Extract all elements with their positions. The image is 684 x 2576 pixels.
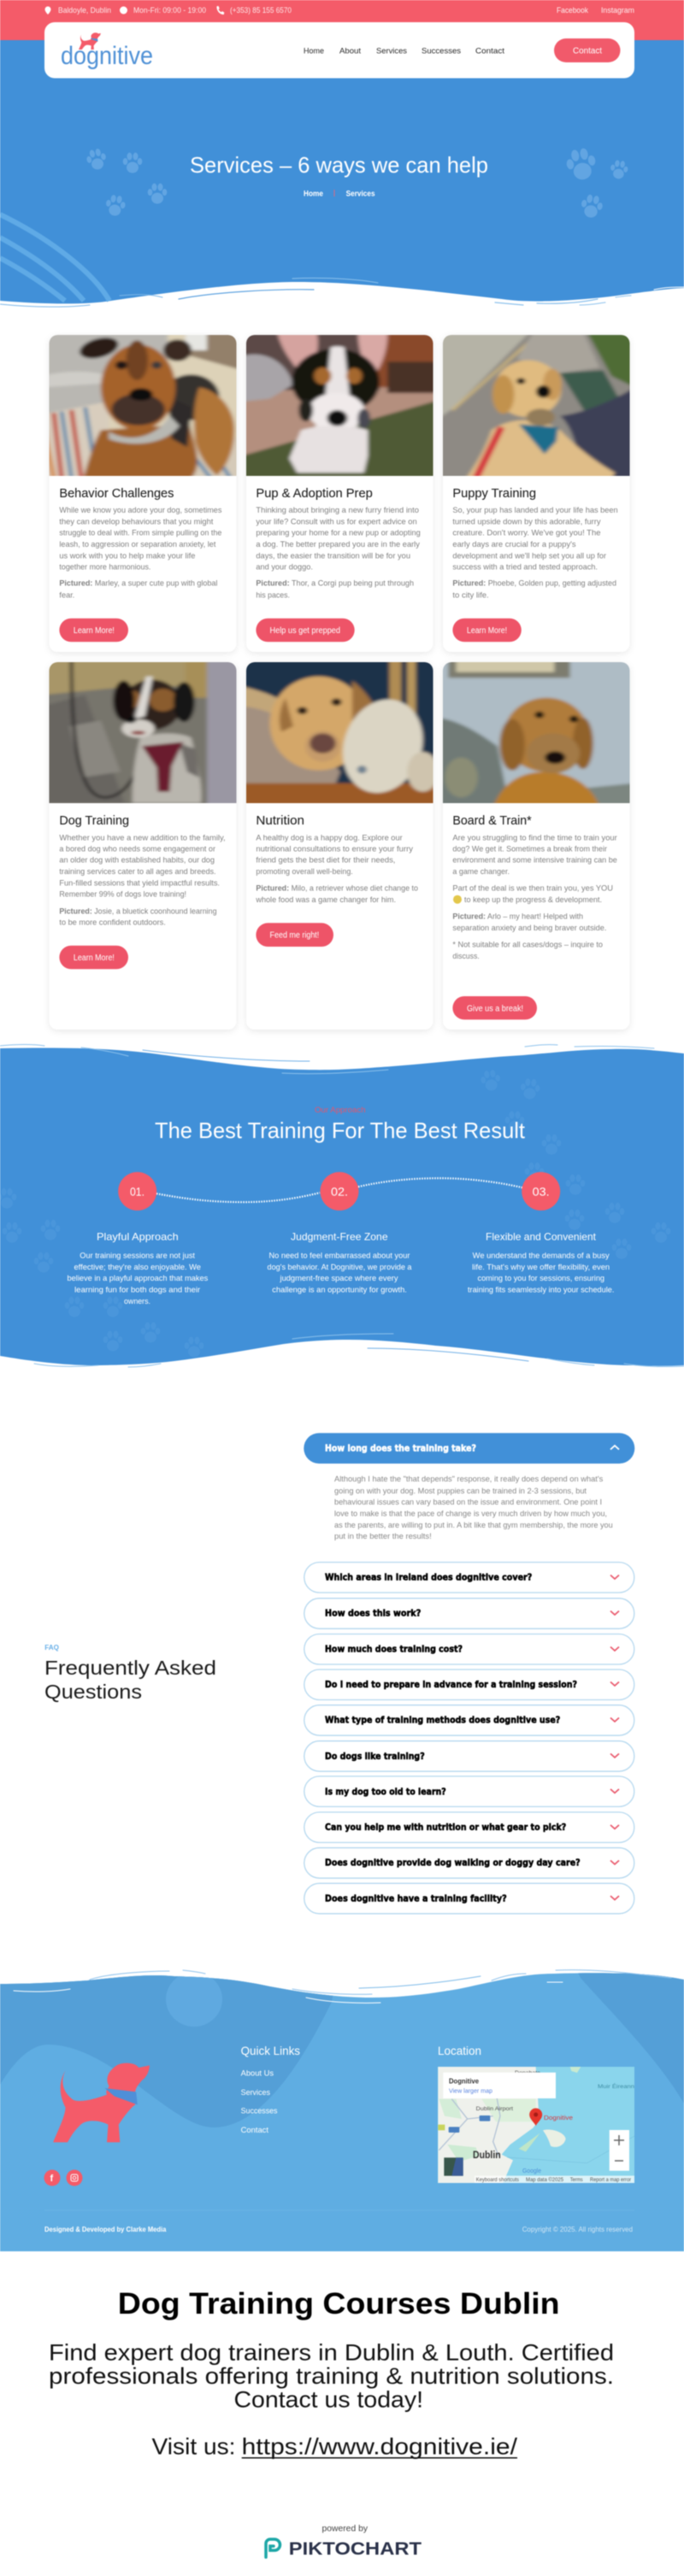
footer panel — [0, 1965, 684, 2251]
card body: turned upside down by this adorable, furry — [452, 517, 601, 525]
card body: whole food was a game changer for him. — [255, 895, 396, 904]
closing paragraph: professionals offering training & nutrition solutions. — [49, 2363, 614, 2389]
top bar — [0, 0, 684, 41]
icon: piktochart logo — [266, 2539, 280, 2557]
map info box: View larger map — [449, 2086, 492, 2095]
card body: dog? We get it. Sometimes a break from their — [452, 844, 607, 853]
map info box — [443, 2073, 556, 2098]
question 10 — [304, 1848, 634, 1878]
card body: Pictured: Arlo – my heart! Helped with — [452, 912, 583, 920]
card body: early days are crucial for a puppy's — [452, 540, 576, 549]
section wave strokes — [0, 1044, 684, 1367]
menu: Contact — [475, 46, 504, 56]
step 3: training fits seamlessly into your schedule. — [468, 1285, 614, 1294]
card body: Part of the deal is we then train you, yes YOU — [452, 884, 613, 893]
phone number: (+353) 85 155 6570 — [230, 6, 292, 15]
step 3: 03. — [533, 1184, 550, 1198]
step 1: believe in a playful approach that makes — [67, 1274, 209, 1282]
step 3 — [468, 1172, 614, 1294]
breadcrumb — [304, 190, 375, 198]
card: Pup & Adoption Prep — [242, 333, 439, 652]
hero arcs — [0, 214, 109, 301]
button — [256, 619, 355, 642]
card body: * Not suitable for all cases/dogs – inquire to — [452, 940, 603, 948]
card body: Fun-filled sessions that yield impactful results. — [59, 878, 220, 887]
open question: How long does the training take? — [325, 1444, 476, 1454]
closing paragraph: Contact us today! — [234, 2387, 423, 2413]
card body: Pictured: Thor, a Corgi pup being put through — [256, 579, 414, 588]
button — [256, 923, 333, 947]
address: Baldoyle, Dublin — [58, 6, 111, 15]
question 9: Can you help me with nutrition or what gear to pick? — [325, 1822, 566, 1833]
card title: Dog Training — [59, 813, 129, 828]
card title: Behavior Challenges — [59, 486, 174, 501]
card: Behavior Challenges — [42, 333, 242, 652]
card body: friend gets the best diet for their needs, — [256, 856, 395, 865]
card body: While we know you adore your dog, sometimes — [59, 506, 222, 514]
card body: separation anxiety and being braver outside. — [452, 924, 606, 932]
opening hours: Mon-Fri: 09:00 - 19:00 — [133, 6, 206, 15]
map attribution: Terms — [570, 2178, 583, 2183]
card body: a game changer. — [452, 867, 510, 876]
card body: and your doggo. — [256, 562, 313, 571]
button: Help us get prepped — [270, 626, 340, 636]
button: Feed me right! — [270, 931, 319, 940]
icon: facebook: f — [50, 2174, 53, 2184]
step 1: effective; they're also enjoyable. We — [74, 1263, 201, 1271]
map attribution: Keyboard shortcuts — [476, 2178, 519, 2183]
map attribution: Report a map error — [590, 2178, 631, 2183]
hero paw prints — [85, 147, 629, 220]
card body: his paces. — [256, 590, 290, 599]
card body: development and we'll help set you all up for — [452, 551, 606, 560]
dotted connector two — [358, 1178, 522, 1188]
quick links — [241, 2044, 300, 2135]
card body: us work with you to help make your life — [59, 551, 195, 560]
map attribution — [475, 2175, 634, 2183]
card body: environment and some intensive training can be — [452, 856, 617, 865]
hero wave strokes — [0, 278, 684, 307]
card body: a bored dog who needs some engagement or — [59, 844, 215, 853]
logo — [61, 32, 153, 70]
question 11: Does dognitive have a training facility? — [325, 1893, 507, 1904]
step 2: No need to feel embarrassed about your — [268, 1251, 410, 1259]
question 2 — [304, 1562, 634, 1593]
step 3: Flexible and Convenient — [486, 1230, 597, 1242]
quick links: Successes — [241, 2107, 278, 2115]
button: Learn More! — [467, 626, 507, 636]
map marker — [529, 2109, 573, 2126]
eyebrow: Our Approach — [315, 1106, 366, 1114]
map: Dublin — [473, 2151, 501, 2161]
card body: to be more confident outdoors. — [59, 918, 166, 926]
FAQ label: FAQ — [44, 1644, 59, 1652]
icon: facebook — [44, 2170, 60, 2186]
step 2: 02. — [331, 1184, 348, 1198]
panel: approach — [0, 1044, 684, 1367]
card body — [59, 506, 222, 599]
location heading: Location — [438, 2044, 481, 2057]
card body: to city life. — [452, 590, 489, 599]
menu: Services — [376, 46, 407, 56]
answer: going on with your dog. Most puppies can be trained in 2-3 sessions, but — [334, 1487, 587, 1495]
question 10: Does dognitive provide dog walking or doggy day care? — [325, 1858, 581, 1869]
quick links: Services — [241, 2088, 270, 2098]
hero title: Services – 6 ways we can help — [190, 152, 488, 178]
FAQ heading: Frequently Asked — [44, 1657, 216, 1679]
map: Google — [522, 2168, 541, 2174]
photo: Phoebe — [439, 333, 634, 478]
card body — [452, 833, 617, 960]
facebook link: Facebook — [557, 6, 588, 15]
button — [452, 996, 537, 1019]
card body: Pictured: Marley, a super cute pup with global — [59, 579, 217, 588]
question 6: What type of training methods does dognitive use? — [325, 1716, 560, 1726]
card body: creature. Don't worry. We've got you! The — [452, 529, 600, 537]
footer wave strokes — [14, 1970, 671, 2003]
question 7: Do dogs like training? — [325, 1752, 425, 1762]
question 7 — [304, 1741, 634, 1771]
card title: Puppy Training — [452, 486, 536, 501]
card body: Pictured: Phoebe, Golden pup, getting adjusted — [452, 579, 616, 588]
dotted connector one — [156, 1193, 320, 1202]
card: Board & Train — [439, 658, 634, 1030]
step 2: Judgment-Free Zone — [291, 1230, 388, 1242]
visit link: https://www.dognitive.ie/ — [242, 2434, 518, 2460]
card body: a dog. The better prepared you are in the early — [256, 540, 420, 549]
navigation card — [44, 22, 634, 79]
card body: promoting overall well-being. — [256, 867, 353, 876]
icon: footer dog — [53, 2063, 150, 2142]
card body: your life? Consult with us for expert advice on — [256, 517, 417, 525]
question 3 — [304, 1599, 634, 1628]
card body — [59, 833, 226, 926]
photo: Thor — [242, 333, 439, 478]
question 5 — [304, 1669, 634, 1700]
card title: Board & Train* — [452, 813, 532, 828]
card body: nutritional consultations to ensure your furry — [256, 844, 413, 853]
icon: logo dog — [79, 32, 101, 50]
piktochart badge: powered by — [321, 2524, 368, 2534]
step 2: judgment-free space where every — [279, 1274, 398, 1282]
card body — [452, 506, 618, 599]
closing block — [49, 2287, 614, 2460]
card body: Pictured: Milo, a retriever whose diet change to — [256, 884, 418, 893]
step 3: We understand the demands of a busy — [473, 1251, 610, 1259]
map marker: Dognitive — [544, 2114, 573, 2121]
breadcrumb: Home — [304, 190, 323, 198]
card body: days, the easier the transition will be for you — [256, 551, 410, 560]
step 1: Our training sessions are not just — [80, 1251, 195, 1259]
question 8: Is my dog too old to learn? — [325, 1787, 446, 1797]
answer: as the parents, are willing to put in. A bit like that gym membership, the more you — [334, 1521, 613, 1529]
instagram link: Instagram — [601, 6, 634, 15]
card body: preparing your home for a new pup or adopting — [256, 529, 421, 537]
card body — [255, 833, 418, 904]
card body — [256, 506, 421, 599]
card body: training services cater to all ages and breeds. — [59, 867, 216, 876]
button: Give us a break! — [467, 1004, 523, 1013]
closing paragraph: Find expert dog trainers in Dublin & Louth. Certified — [49, 2340, 614, 2366]
menu: Successes — [422, 46, 461, 56]
map labels: Muir Éireann — [598, 2082, 634, 2090]
breadcrumb: Services — [346, 190, 375, 198]
card body: leash, to aggression or separation anxiety, let — [59, 540, 216, 549]
card body: fear. — [59, 590, 74, 599]
question 11 — [304, 1883, 634, 1914]
card body: together more harmonious. — [59, 562, 150, 571]
card body: Remember 99% of dogs love training! — [59, 889, 186, 898]
card title: Pup & Adoption Prep — [256, 486, 373, 501]
card title: Nutrition — [256, 813, 304, 828]
logo wordmark: dognitive — [61, 42, 153, 70]
question 4: How much does training cost? — [325, 1645, 463, 1655]
card: Nutrition — [242, 658, 439, 1030]
button — [59, 619, 128, 642]
visit link — [152, 2434, 518, 2460]
menu — [304, 46, 504, 56]
open question — [304, 1433, 634, 1464]
button — [452, 619, 522, 642]
contact button: Contact — [573, 46, 602, 56]
step 2: challenge is an opportunity for growth. — [272, 1285, 407, 1294]
card body: A healthy dog is a happy dog. Explore our — [256, 833, 403, 842]
card: Dog Training — [42, 658, 242, 1030]
panel: FAQ intro — [44, 1644, 216, 1703]
button: Learn More! — [74, 626, 115, 636]
step 3: coming to you for sessions, ensuring — [477, 1274, 604, 1282]
card body: Thinking about bringing a new furry friend into — [256, 506, 419, 514]
question 6 — [304, 1705, 634, 1735]
step 1 — [67, 1172, 209, 1306]
card body: struggle to deal with. From simple pulling on the — [59, 529, 221, 537]
answer: put in the better the results! — [334, 1532, 432, 1540]
step 1: 01. — [130, 1184, 144, 1198]
card body: discuss. — [452, 952, 480, 960]
map zoom controls — [610, 2130, 629, 2171]
quick links: Quick Links — [241, 2044, 300, 2057]
icon: instagram — [67, 2170, 82, 2186]
step 1: learning fun for both dogs and their — [74, 1285, 200, 1294]
menu: Home — [304, 46, 324, 56]
answer: love to make is that the pace of change is very much driven by how much you, — [334, 1509, 607, 1517]
card body: Pictured: Josie, a bluetick coonhound learning — [59, 907, 217, 915]
question 2: Which areas in Ireland does dognitive cover? — [325, 1573, 532, 1583]
footer background — [0, 1965, 684, 2251]
card body: they can develop behaviours that you might — [59, 517, 214, 525]
button: Learn More! — [74, 954, 115, 963]
card body: to keep up the progress & development. — [464, 895, 602, 904]
answer — [334, 1475, 613, 1540]
card: Puppy Training — [439, 333, 634, 652]
card body: Whether you have a new addition to the family, — [59, 833, 226, 842]
question 4 — [304, 1634, 634, 1664]
map attribution: Map data ©2025 — [526, 2177, 564, 2183]
step 2 — [267, 1172, 412, 1294]
photo: Josie — [48, 661, 237, 804]
question 8 — [304, 1776, 634, 1806]
photo: Marley — [42, 333, 242, 478]
contact button — [554, 38, 621, 62]
map: Dublin Airport — [476, 2107, 513, 2112]
closing paragraph — [49, 2340, 614, 2413]
map info box: Dognitive — [449, 2078, 480, 2085]
menu: About — [339, 46, 361, 56]
question 3: How does this work? — [325, 1609, 421, 1619]
map: Donabate — [515, 2071, 541, 2076]
photo: Milo — [242, 658, 439, 809]
piktochart badge: PIKTOCHART — [289, 2539, 422, 2559]
piktochart badge — [266, 2524, 422, 2559]
quick links: About Us — [241, 2069, 274, 2078]
section heading: The Best Training For The Best Result — [155, 1118, 526, 1143]
quick links: Contact — [241, 2126, 268, 2135]
question 5: Do I need to prepare in advance for a training session? — [325, 1680, 577, 1690]
footer credit: Designed & Developed by Clarke Media — [44, 2225, 167, 2233]
button — [59, 946, 128, 969]
step 2: dog's behavior. At Dognitive, we provide a — [267, 1263, 412, 1271]
map — [438, 2067, 634, 2183]
icon: clock — [120, 7, 127, 14]
copyright: Copyright © 2025. All rights reserved — [522, 2225, 633, 2233]
FAQ heading: Questions — [44, 1681, 142, 1703]
answer: behavioural issues can vary based on the issue and environment. One point I — [334, 1498, 602, 1506]
step 1: owners. — [124, 1297, 150, 1306]
card body: So, your pup has landed and your life has been — [452, 506, 618, 514]
step 1: Playful Approach — [97, 1230, 179, 1242]
card body: an older dog with established habits, our dog — [59, 856, 215, 865]
step 3: life. That's why we offer flexibility, even — [472, 1263, 610, 1271]
icon: location pin — [44, 7, 51, 15]
card body: Are you struggling to find the time to train your — [452, 833, 617, 842]
section paw prints — [0, 1069, 670, 1357]
panel: FAQ accordion — [304, 1433, 634, 1914]
icon: phone — [216, 6, 224, 15]
visit link: Visit us: — [152, 2434, 236, 2460]
hero panel — [0, 40, 684, 307]
closing title: Dog Training Courses Dublin — [118, 2287, 560, 2321]
photo: Arlo — [439, 658, 634, 809]
card body: success with a tried and tested approach. — [452, 562, 598, 571]
question 9 — [304, 1812, 634, 1842]
answer: Although I hate the "that depends" response, it really does depend on what's — [334, 1475, 604, 1483]
